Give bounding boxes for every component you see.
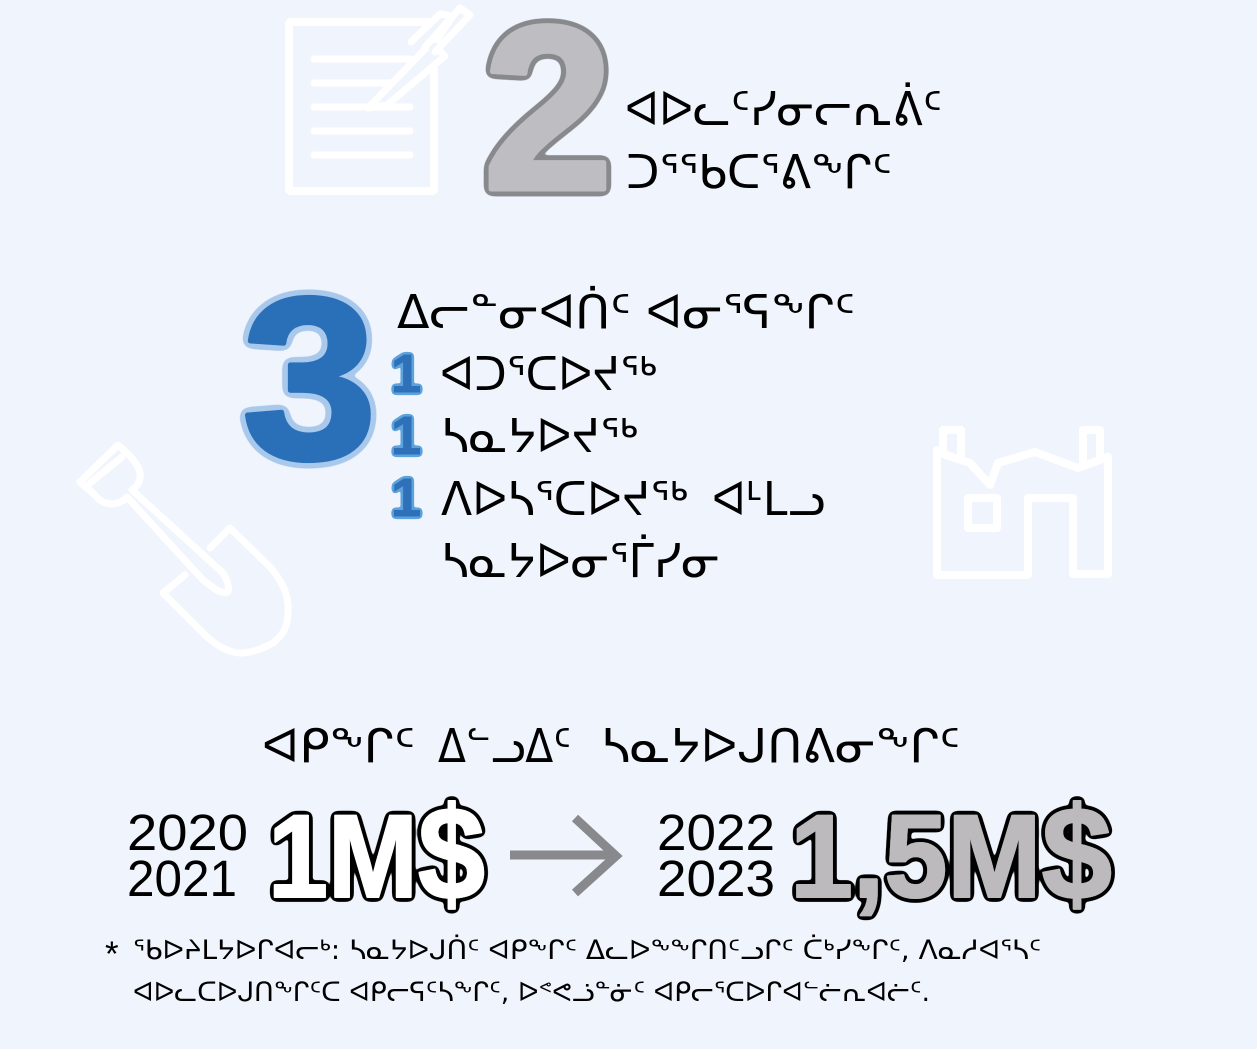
list: section 3 text: ᓴᓇᔭᐅᔪᕐᒃ <box>441 409 638 463</box>
list: section 3 text <box>397 285 855 588</box>
amount: 1,5M$: 1,5M <box>790 791 1052 923</box>
amount: 1M$: $ <box>418 780 485 927</box>
list: section 3 text: ᐱᐅᓴᕐᑕᐅᔪᕐᒃ <box>441 472 688 526</box>
big number 3: 3 <box>242 251 377 508</box>
heading: community buildings: ᐃᓪᓗᐃᑦ <box>438 719 571 773</box>
icon: document with pen <box>289 8 470 191</box>
list: section 3 text: ᐊᑐᕐᑕᐅᔪᕐᒃ <box>440 347 657 401</box>
years: 2020-2021: 2021 <box>127 850 237 907</box>
list markers: small ones: 1 <box>391 468 421 528</box>
list markers: small ones: 1 <box>391 344 421 404</box>
amount: 1M$: 1M <box>268 791 432 923</box>
list: section 3 text: ᐃᓕᓐᓂᐊᑏᑦ ᐊᓂᕐᕋᖕᒋᑦ <box>397 285 855 339</box>
list: section 3 text: ᐊᒻᒪᓗ <box>712 472 825 526</box>
heading: community buildings: ᓴᓇᔭᐅᒍᑎᕕᓂᖕᒋᑦ <box>601 719 960 773</box>
footnote: ᐊᐅᓚᑕᐅᒍᑎᖕᒋᑦᑕ ᐊᑭᓕᕋᑦᓴᖕᒋᑦ, ᐅᕝᕙᓘᓐᓃᑦ ᐊᑭᓕᕐᑕᐅᒋᐊᓪᓖᕆᐊᓖᑦ. <box>133 977 930 1008</box>
list markers: small ones: 1 <box>391 406 421 466</box>
years: 2022-2023 <box>657 804 775 907</box>
years: 2022-2023: 2022 <box>657 804 775 861</box>
list: section 3 text: ᓴᓇᔭᐅᓂᕐᒦᓯᓂ <box>441 534 720 588</box>
label: section 2 text <box>625 82 942 199</box>
icon: factory <box>937 430 1108 575</box>
footnote <box>105 934 1041 1008</box>
heading: community buildings <box>262 719 960 773</box>
heading: community buildings: ᐊᑭᖕᒋᑦ <box>262 719 415 773</box>
label: section 2 text: ᐊᐅᓚᑦᓯᓂᓕᕆᕖᑦ <box>625 82 942 136</box>
years: 2022-2023: 2023 <box>657 850 775 907</box>
footnote: * <box>105 935 119 974</box>
list markers: small ones <box>391 344 421 528</box>
amount: 1,5M$: $ <box>1042 780 1112 927</box>
years: 2020-2021: 2020 <box>127 804 248 861</box>
icon: shovel <box>80 445 288 653</box>
label: section 2 text: ᑐᕐᕐᑲᑕᕐᕕᖕᒋᑦ <box>626 145 892 199</box>
arrow <box>510 818 616 893</box>
years: 2020-2021 <box>127 804 248 907</box>
footnote: ᕐᑲᐅᔨᒪᔭᐅᒋᐊᓕᒃ: ᓴᓇᔭᐅᒍᑏᑦ ᐊᑭᖕᒋᑦ ᐃᓚᐅᖕᖕᒋᑎᑦᓗᒋᑦ ᑖᒃᓯᖕᒋᑦ, ᐱᓇᓱᐊᕐᓴᑦ <box>133 934 1041 966</box>
